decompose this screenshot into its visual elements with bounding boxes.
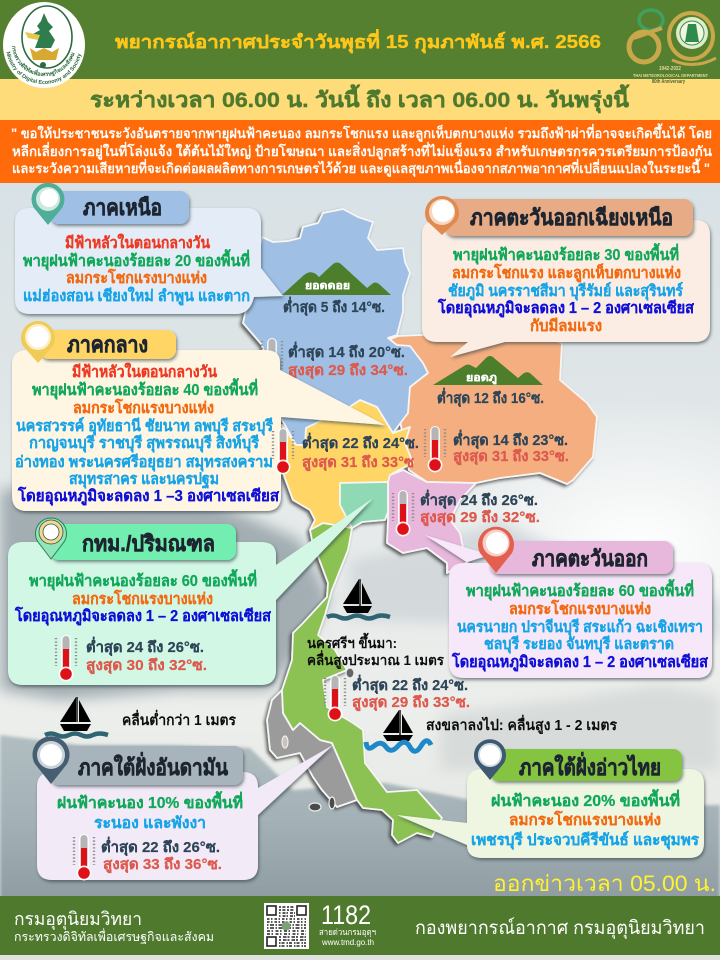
east pin [478, 527, 514, 573]
mountain: doi peak: ยอดดอย [305, 281, 350, 292]
logo: 80th anniversary: THAI METEOROLOGICAL DEPARTMENT [633, 73, 708, 78]
Bangkok temperature: ต่ำสุด 24 ถึง 26°ซ. [86, 636, 204, 656]
footer department name: กรมอุตุนิยมวิทยา [14, 909, 142, 930]
logo: ministry seal: Ministry of Digital Economy and Society [6, 52, 82, 84]
header band [0, 0, 720, 79]
north temperature: สูงสุด 29 ถึง 34°ซ. [288, 362, 408, 379]
central forecast text: สมุทรสาคร และนครปฐม [69, 471, 219, 489]
icon: boat, upper Gulf [327, 579, 390, 618]
northeast temperature [453, 429, 569, 465]
panel: east [425, 527, 712, 678]
north pin [32, 183, 64, 225]
north forecast text: มีฟ้าหลัวในตอนกลางวัน [65, 233, 210, 252]
islands [282, 668, 354, 811]
Bangkok temperature: สูงสุด 30 ถึง 32°ซ. [86, 657, 207, 674]
Bangkok heading pill [50, 524, 236, 560]
northeast temperature: ต่ำสุด 14 ถึง 23°ซ. [453, 429, 568, 449]
north forecast text: แม่ฮ่องสอน เชียงใหม่ ลำพูน และตาก [23, 286, 250, 307]
central temperature: สูงสุด 31 ถึง 33°ซ [302, 454, 414, 471]
Andaman temperature: ต่ำสุด 22 ถึง 26°ซ. [101, 836, 220, 856]
central callout body [12, 350, 385, 511]
Bangkok forecast text: พายุฝนฟ้าคะนองร้อยละ 60 ของพื้นที่ [29, 569, 257, 591]
panel: north [15, 183, 283, 314]
central forecast text: กาญจนบุรี ราชบุรี สุพรรณบุรี สิงห์บุรี [29, 434, 260, 453]
panel: northeast [422, 196, 710, 357]
footer department name [14, 909, 214, 944]
Andaman temperature: สูงสุด 33 ถึง 36°ซ. [103, 856, 222, 873]
Andaman heading pill [50, 746, 243, 785]
east temperature [420, 489, 540, 526]
Gulf heading pill [490, 749, 682, 781]
central forecast text: อ่างทอง พระนครศรีอยุธยา สมุทรสงคราม [15, 453, 273, 472]
Andaman callout body [37, 745, 333, 880]
Bangkok forecast text [14, 569, 271, 627]
warning text block: " ขอให้ประชาชนระวังอันตรายจากพายุฝนฟ้าคะนอง ลมกระโชกแรง และลูกเห็บตกบางแห่ง รวมถึงฟ้าผ่าที่อาจจะเกิดขึ้นได้ โดย [11, 123, 712, 142]
Bangkok pin [36, 518, 66, 559]
northeast pin [425, 196, 459, 235]
logo: ministry seal: กระทรวงดิจิทัลเพื่อเศรษฐกิจและสังคม [12, 46, 75, 76]
Bangkok thermometer [56, 635, 76, 682]
subtitle band: ระหว่างเวลา 06.00 น. วันนี้ ถึง เวลา 06.00 น. วันพรุ่งนี้ [90, 84, 630, 114]
Andaman thermometer [74, 834, 94, 880]
icon: boat, lower Gulf [366, 710, 431, 751]
north callout body [15, 208, 283, 314]
north forecast text [23, 233, 250, 307]
hotline: www.tmd.go.th [321, 937, 374, 947]
east forecast text: พายุฝนฟ้าคะนองร้อยละ 60 ของพื้นที่ [466, 579, 694, 601]
northeast forecast text: ชัยภูมิ นครราชสีมา บุรีรัมย์ และสุรินทร์ [448, 282, 684, 302]
hotline [319, 900, 376, 947]
northeast forecast text: โดยอุณหภูมิจะลดลง 1 – 2 องศาเซลเซียส [437, 298, 694, 319]
central forecast text: พายุฝนฟ้าคะนองร้อยละ 40 ของพื้นที่ [32, 378, 258, 400]
logo: ministry seal [3, 2, 85, 88]
QR code [264, 903, 309, 949]
subtitle band [0, 79, 720, 120]
northeast forecast text: ลมกระโชกแรง และลูกเห็บตกบางแห่ง [452, 262, 681, 284]
east heading: ภาคตะวันออก [532, 546, 648, 571]
northeast peak temperature: ต่ำสุด 12 ถึง 16°ซ. [437, 387, 544, 407]
east thermometer [393, 490, 413, 536]
northeast callout body [422, 220, 710, 357]
east forecast text: ลมกระโชกแรงบางแห่ง [509, 599, 651, 618]
panel: central [12, 321, 385, 511]
region: central [282, 400, 413, 530]
hotline: 1182 [321, 900, 371, 930]
mountain: phu peak [433, 356, 543, 385]
Gulf pin [474, 739, 506, 780]
footer [0, 896, 720, 955]
central temperature: ต่ำสุด 22 ถึง 24°ซ. [302, 432, 419, 452]
warning text block: หลีกเลี่ยงการอยู่ในที่โล่งแจ้ง ใต้ต้นไม้ใหญ่ ป้ายโฆษณา และสิ่งปลูกสร้างที่ไม่แข็งแรง สำหรับเกษตรกรควรเตรียมการป้องกัน [12, 141, 713, 160]
warning text block [0, 120, 720, 183]
region: northeast [388, 335, 597, 484]
north temperature: ต่ำสุด 14 ถึง 20°ซ. [288, 341, 405, 361]
warning text block: และระวังความเสียหายที่จะเกิดต่อผลผลิตทางการเกษตรไว้ด้วย และดูแลสุขภาพเนื่องจากสภาพอากาศที่เปลี่ยนแปลงในระยะนี้ " [12, 158, 710, 177]
central heading: ภาคกลาง [67, 332, 148, 357]
region: east [387, 470, 476, 573]
Andaman heading: ภาคใต้ฝั่งอันดามัน [78, 751, 228, 780]
Andaman pin [32, 736, 70, 784]
forecast bureau: กองพยากรณ์อากาศ กรมอุตุนิยมวิทยา [415, 917, 705, 940]
panel: south Andaman [32, 736, 333, 880]
east temperature: ต่ำสุด 24 ถึง 26°ซ. [420, 489, 538, 509]
region: south Gulf [282, 523, 442, 843]
Andaman forecast text: ระนอง และพังงา [94, 815, 206, 832]
mountain: doi peak [282, 262, 391, 295]
logo: 80th anniversary: 80th Anniversary [652, 79, 685, 85]
Andaman forecast text: ฝนฟ้าคะนอง 10% ของพื้นที่ [57, 791, 243, 812]
east forecast text [451, 579, 708, 673]
north forecast text: พายุฝนฟ้าคะนองร้อยละ 20 ของพื้นที่ [23, 249, 250, 271]
east temperature: สูงสุด 29 ถึง 32°ซ. [420, 509, 540, 526]
wave text: Andaman: คลื่นต่ำกว่า 1 เมตร [122, 709, 236, 729]
wave text: Nakhon Si Thammarat upward [307, 632, 444, 669]
Bangkok forecast text: ลมกระโชกแรงบางแห่ง [72, 589, 213, 608]
north heading: ภาคเหนือ [83, 195, 162, 220]
north peak temperature: ต่ำสุด 5 ถึง 14°ซ. [283, 296, 385, 316]
Gulf forecast text [471, 789, 700, 850]
Bangkok temperature [86, 636, 207, 674]
northeast forecast text: กับมีลมแรง [530, 317, 602, 335]
south temperature: ต่ำสุด 22 ถึง 24°ซ. [352, 674, 468, 694]
Gulf forecast text: ลมกระโชกแรงบางแห่ง [509, 810, 661, 829]
central thermometer [273, 428, 293, 474]
logo: 80th anniversary [629, 10, 716, 85]
north forecast text: ลมกระโชกแรงบางแห่ง [66, 268, 207, 287]
Andaman temperature [101, 836, 222, 873]
panel: south Gulf [397, 739, 704, 858]
issue time: ออกข่าวเวลา 05.00 น. [493, 871, 716, 896]
south temperature [352, 674, 470, 711]
south temperature: สูงสุด 29 ถึง 33°ซ. [352, 694, 470, 711]
region: Bangkok [340, 482, 388, 528]
Gulf forecast text: เพชรบุรี ประจวบคีรีขันธ์ และชุมพร [471, 831, 700, 850]
east heading pill [490, 541, 673, 574]
northeast heading pill [445, 199, 693, 236]
wave text: Nakhon Si Thammarat upward: คลื่นสูงประมาณ 1 เมตร [307, 650, 444, 669]
central heading pill [40, 330, 176, 359]
central forecast text: นครสวรรค์ อุทัยธานี ชัยนาท ลพบุรี สระบุรี [16, 417, 274, 436]
thermometer north [262, 338, 282, 384]
Gulf heading: ภาคใต้ฝั่งอ่าวไทย [519, 751, 661, 780]
logo: 80th anniversary: 1942-2022 [659, 66, 681, 72]
Gulf forecast text: ฝนฟ้าคะนอง 20% ของพื้นที่ [491, 789, 680, 810]
panel: Bangkok and vicinity [8, 498, 373, 685]
north temperature [288, 341, 408, 379]
central forecast text: ลมกระโชกแรงบางแห่ง [73, 398, 214, 417]
Bangkok heading: กทม./ปริมณฑล [82, 531, 215, 556]
Andaman forecast text [57, 791, 243, 832]
hotline: สายด่วนกรมอุตุฯ [319, 927, 376, 938]
northeast forecast text: พายุฝนฟ้าคะนองร้อยละ 30 ของพื้นที่ [453, 243, 679, 265]
title: พยากรณ์อากาศประจำวันพุธที่ 15 กุมภาพันธ์ พ.ศ. 2566 [115, 29, 601, 54]
central forecast text: โดยอุณหภูมิจะลดลง 1 –3 องศาเซลเซียส [17, 486, 280, 507]
region: Andaman south [267, 690, 357, 807]
central forecast text: มีฟ้าหลัวในตอนกลางวัน [72, 362, 217, 381]
map of Thailand [243, 209, 597, 843]
region: north [243, 209, 428, 445]
wave text: Nakhon Si Thammarat upward: นครศรีฯ ขึ้นมา: [307, 632, 397, 651]
central forecast text [15, 362, 280, 507]
Gulf callout body [397, 769, 704, 858]
east callout body [425, 535, 712, 678]
northeast forecast text [437, 243, 694, 335]
north heading pill [50, 191, 189, 224]
mountain: phu peak: ยอดภู [466, 373, 498, 385]
Bangkok callout body [8, 498, 373, 685]
northeast thermometer [425, 426, 445, 472]
east forecast text: ชลบุรี ระยอง จันทบุรี และตราด [484, 635, 674, 654]
south thermometer [325, 675, 345, 722]
Bangkok forecast text: โดยอุณหภูมิจะลดลง 1 – 2 องศาเซลเซียส [14, 606, 271, 627]
northeast heading: ภาคตะวันออกเฉียงเหนือ [470, 205, 673, 230]
central pin [21, 321, 55, 363]
footer department name: กระทรวงดิจิทัลเพื่อเศรษฐกิจและสังคม [14, 928, 214, 944]
icon: boat, Andaman sea [45, 697, 108, 736]
central temperature [302, 432, 419, 471]
wave text: Songkhla downward: สงขลาลงไป: คลื่นสูง 1 - 2 เมตร [426, 714, 617, 734]
northeast temperature: สูงสุด 31 ถึง 33°ซ. [453, 448, 569, 465]
east forecast text: โดยอุณหภูมิจะลดลง 1 – 2 องศาเซลเซียส [451, 652, 708, 673]
